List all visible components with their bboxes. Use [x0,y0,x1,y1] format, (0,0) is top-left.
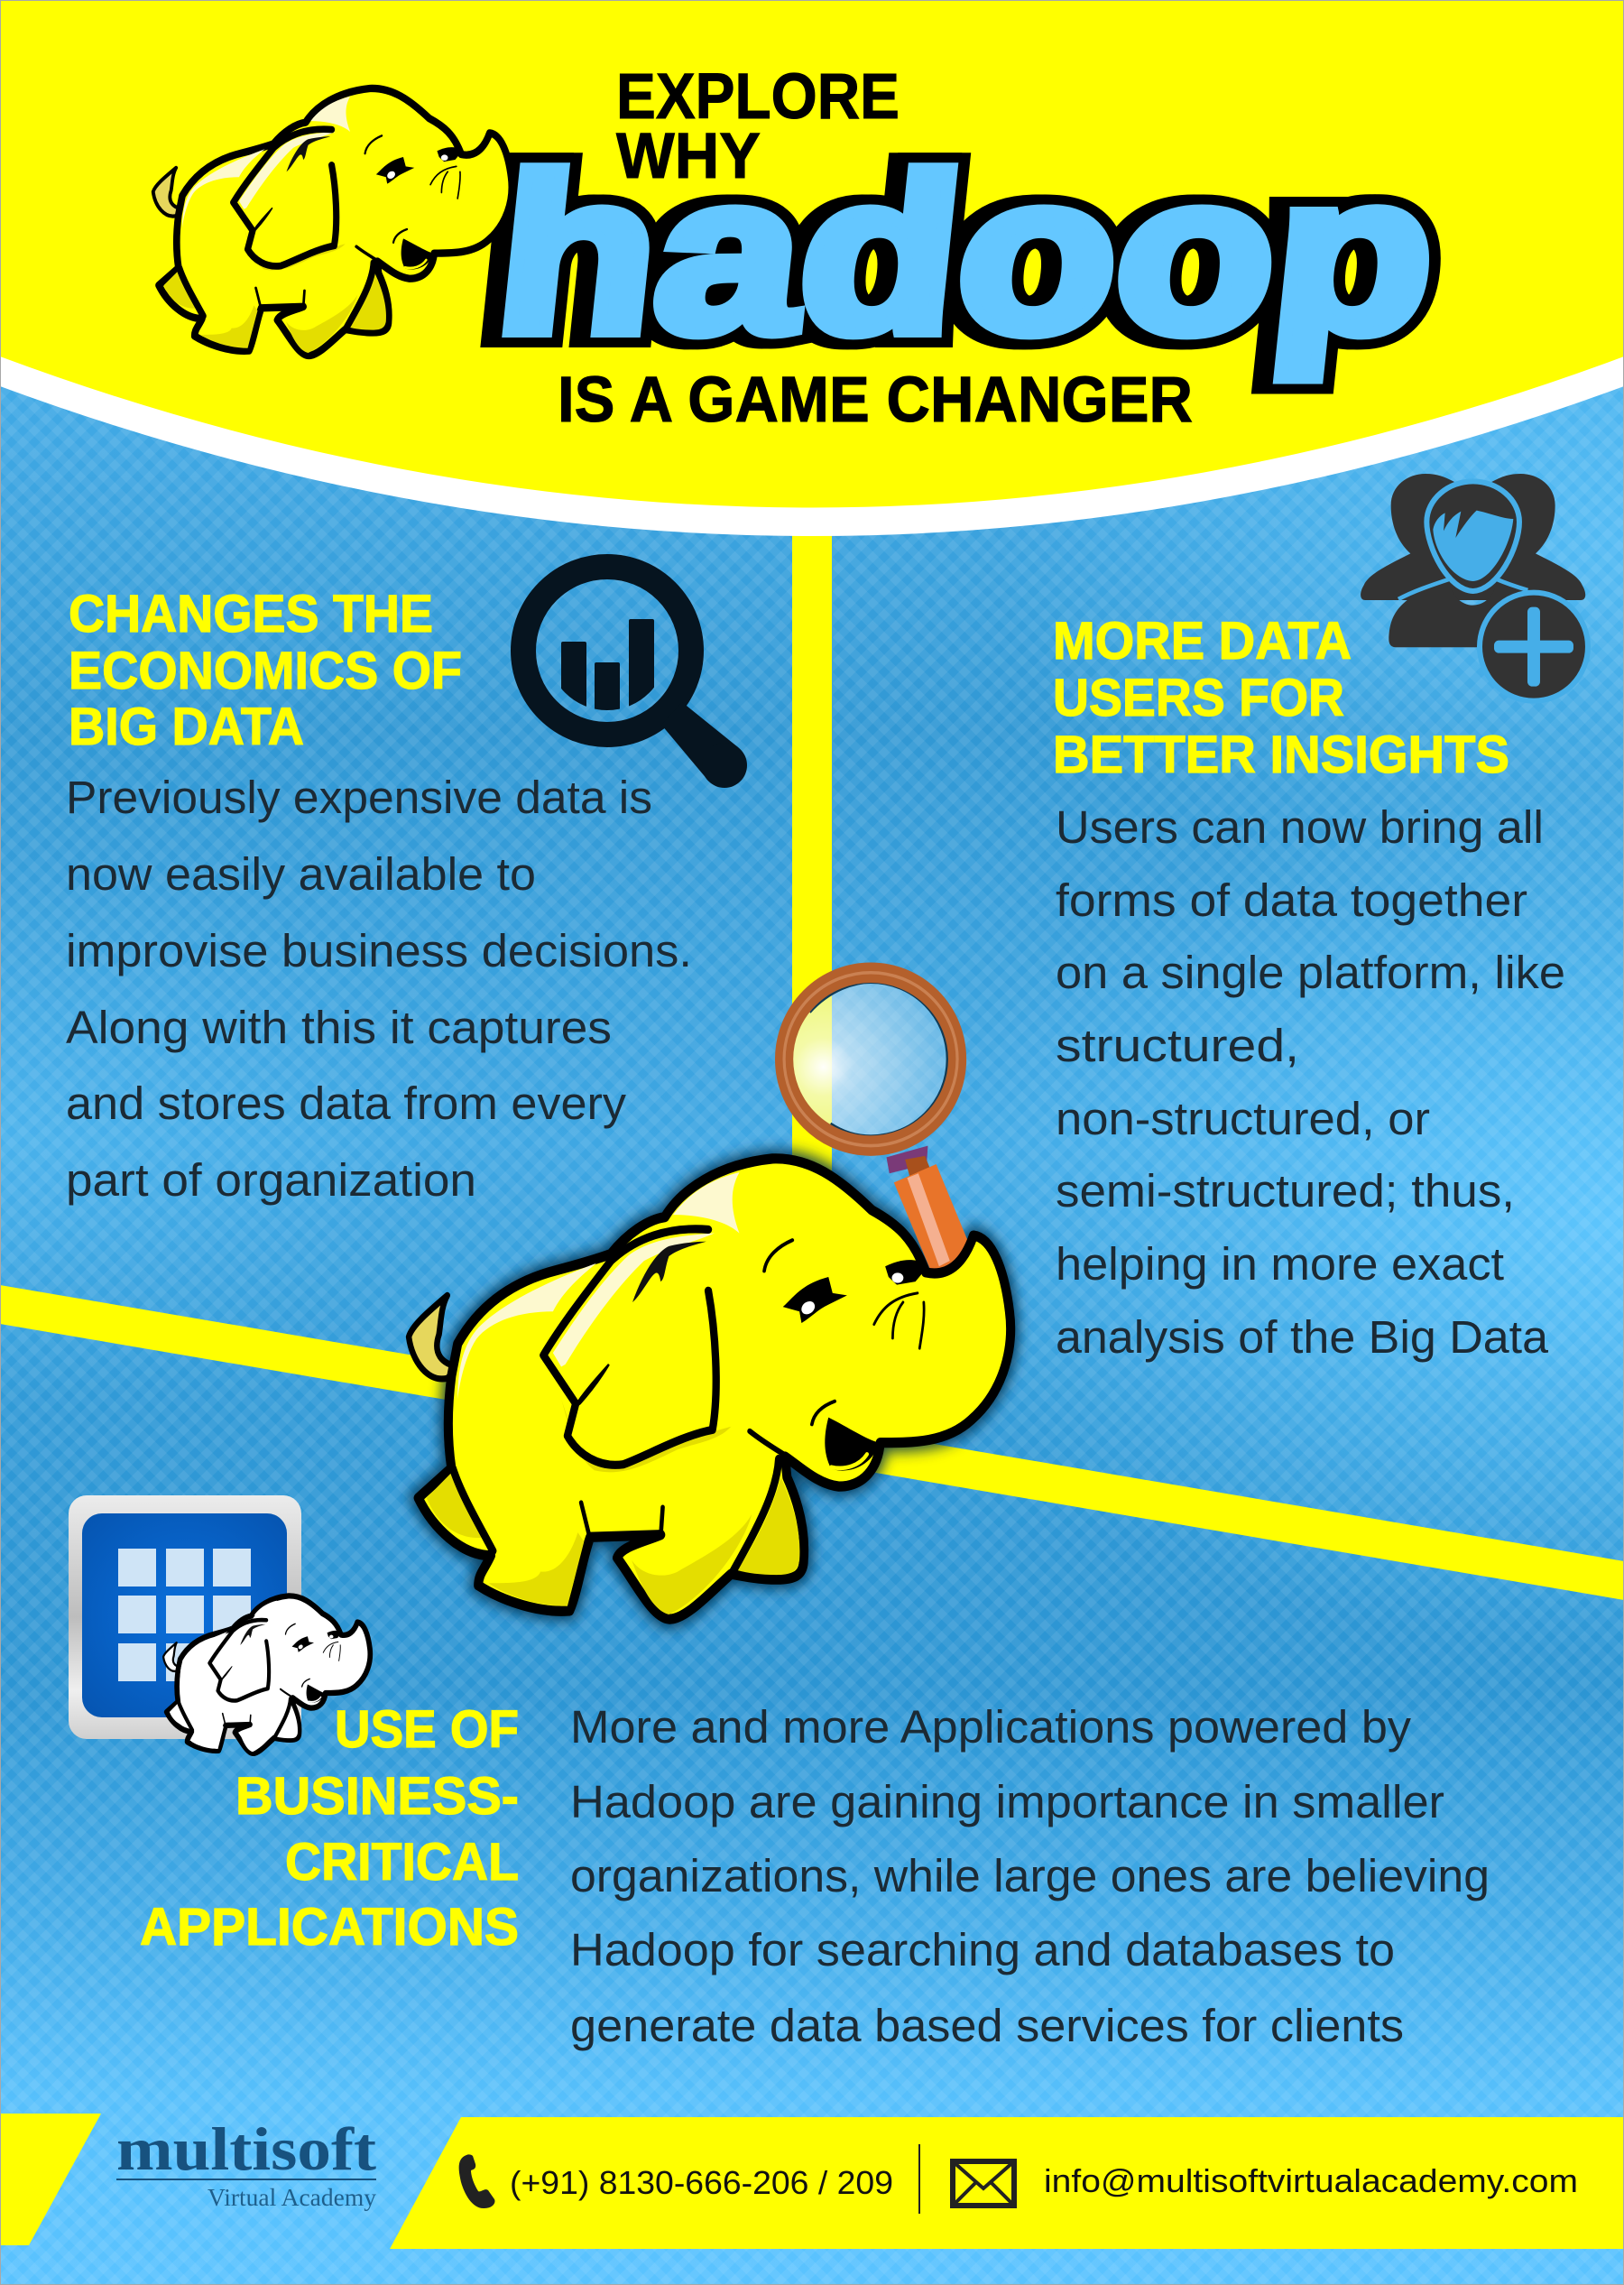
text block: economics: improvise business decisions. [66,925,692,976]
heading: more data users: USERS FOR [1053,669,1344,727]
heading: economics: ECONOMICS OF [69,642,462,700]
text block: more data users: semi-structured; thus, [1056,1165,1515,1217]
text block: applications: organizations, while large ones are believing [570,1850,1490,1901]
yellow vertical divider [792,532,832,1182]
footer: contact band [390,2117,1624,2249]
text block: more data users: analysis of the Big Data [1056,1311,1549,1363]
hadoop wordmark: hadoop [486,129,1447,379]
footer: logo multisoft: multisoft [116,2114,376,2183]
title: explore why: EXPLORE [616,61,900,133]
heading: economics: CHANGES THE [69,585,433,643]
heading: applications: USE OF [335,1700,519,1759]
text block: economics: and stores data from every [66,1078,627,1129]
title: explore why [616,61,900,192]
heading: applications [140,1700,519,1957]
text block: more data users: structured, [1056,1020,1299,1071]
hadoop wordmark: hadoop [477,129,1438,379]
heading: more data users: MORE DATA [1053,612,1352,671]
icon: yellow elephant [409,1159,1010,1619]
text block: more data users: on a single platform, like [1056,947,1565,998]
text block: economics: part of organization [66,1154,476,1206]
text block: economics: Along with this it captures [66,1002,612,1053]
text block: more data users: forms of data together [1056,874,1527,926]
text block: applications: Hadoop for searching and databases to [570,1924,1395,1975]
text block: more data users [1056,801,1565,1363]
icon: envelope [953,2161,1014,2206]
text block: applications: More and more Applications powered by [570,1701,1412,1753]
heading: economics: BIG DATA [69,698,304,756]
phone number: (+91) 8130-666-206 / 209 [510,2164,893,2201]
panel: more data users [1053,474,1588,1363]
icon: magnifying glass [784,973,973,1273]
heading: applications: CRITICAL [285,1833,519,1892]
text block: applications: generate data based services for clients [570,2000,1404,2051]
footer: logo multisoft: Virtual Academy [208,2184,376,2211]
heading: applications: APPLICATIONS [140,1898,519,1957]
footer: left accent [0,2114,101,2245]
header curved banner [0,0,1624,536]
icon: magnifier with bar chart [523,567,747,788]
footer: logo multisoft [116,2114,376,2211]
heading: applications: BUSINESS- [235,1767,519,1826]
yellow diagonal divider [0,1285,1624,1600]
heading: more data users: BETTER INSIGHTS [1053,726,1509,784]
panel: business-critical applications [69,1495,1490,2051]
text block: economics [66,772,692,1206]
email address: info@multisoftvirtualacademy.com [1044,2162,1578,2199]
title: explore why: WHY [616,121,761,192]
panel: economics of big data [66,567,747,1206]
icon: white elephant [163,1596,370,1753]
icon: app grid tile [69,1495,301,1739]
title: is a game changer: IS A GAME CHANGER [558,365,1193,436]
text block: economics: now easily available to [66,848,536,900]
text block: economics: Previously expensive data is [66,772,652,823]
text block: more data users: non-structured, or [1056,1093,1430,1144]
hadoop wordmark: hadoop [486,129,1447,379]
text block: more data users: helping in more exact [1056,1238,1504,1290]
icon: users with plus [1361,474,1588,701]
central elephant with magnifying glass [409,973,1010,1619]
text block: applications [570,1701,1490,2051]
text block: applications: Hadoop are gaining importance in smaller [570,1776,1444,1827]
icon: phone [459,2154,495,2208]
text block: more data users: Users can now bring all [1056,801,1544,853]
header elephant [153,88,512,356]
heading: economics [69,585,462,756]
heading: more data users [1053,612,1509,784]
